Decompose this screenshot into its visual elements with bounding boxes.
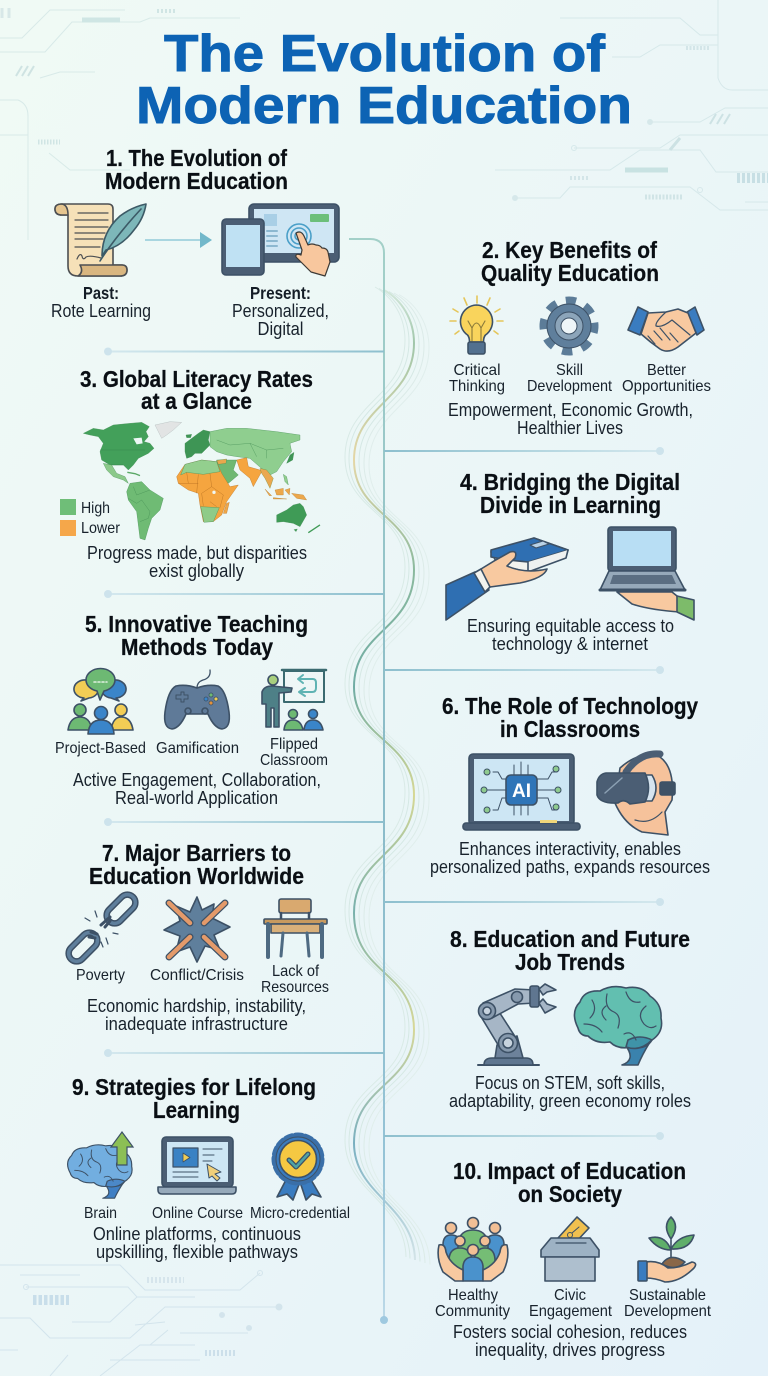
title: Modern Education [136, 77, 632, 135]
text: past: Past: [83, 283, 119, 303]
caption [93, 1224, 301, 1262]
heading: 3. Global Literacy Rates [80, 366, 313, 392]
caption [467, 616, 674, 654]
text: strategy labels [84, 1205, 350, 1222]
caption: Focus on STEM, soft skills, [475, 1073, 665, 1093]
icon: project group [68, 668, 133, 734]
panel: 9. lifelong learning [68, 1074, 350, 1262]
heading [72, 1074, 316, 1123]
heading [105, 145, 288, 194]
caption: adaptability, green economy roles [449, 1091, 691, 1111]
timeline trunk and dividers [104, 239, 664, 1324]
icon: AI laptop: AI [512, 781, 531, 802]
text: barrier labels: Lack of [272, 963, 319, 980]
icon: robot arm [478, 984, 556, 1065]
heading [89, 840, 304, 889]
text: present: Digital [258, 319, 304, 339]
caption: Healthier Lives [517, 418, 623, 438]
heading: Modern Education [105, 168, 288, 194]
icon: gamepad [165, 670, 229, 729]
text: present [232, 283, 329, 339]
heading: Divide in Learning [480, 492, 661, 518]
text: society labels: Sustainable [629, 1287, 706, 1304]
title: The Evolution of [164, 25, 606, 83]
heading: 6. The Role of Technology [442, 693, 698, 719]
heading [85, 611, 308, 660]
text: benefit labels: Critical [454, 362, 500, 379]
text: method labels: Classroom [260, 752, 328, 769]
caption: upskilling, flexible pathways [96, 1242, 298, 1262]
panel: 4. digital divide [446, 469, 694, 654]
legend: High [81, 500, 110, 517]
heading [453, 1158, 686, 1207]
heading: Job Trends [515, 949, 625, 975]
caption: technology & internet [492, 634, 648, 654]
icon: VR headset [597, 754, 675, 835]
text: society labels: Community [435, 1303, 510, 1320]
caption [430, 839, 710, 877]
caption: exist globally [149, 561, 244, 581]
caption: Ensuring equitable access to [467, 616, 674, 636]
icon: handshake [628, 307, 704, 351]
caption: Online platforms, continuous [93, 1224, 301, 1244]
panel: 7. barriers [65, 840, 329, 1034]
caption [453, 1322, 687, 1360]
icon: hand offering book [446, 538, 568, 620]
heading [80, 366, 313, 414]
caption: inequality, drives progress [475, 1340, 665, 1360]
heading [460, 469, 680, 518]
heading: 7. Major Barriers to [102, 840, 291, 866]
text: strategy labels: Micro-credential [250, 1205, 350, 1222]
caption: Real-world Application [115, 788, 278, 808]
text: barrier labels: Conflict/Crisis [150, 967, 244, 984]
icon: tablet and touch screen [222, 204, 339, 276]
heading: on Society [518, 1181, 622, 1207]
title [136, 25, 632, 135]
text: benefit labels: Opportunities [622, 378, 711, 395]
heading: 5. Innovative Teaching [85, 611, 308, 637]
icon: light bulb [450, 296, 503, 354]
icon: online course laptop [158, 1137, 236, 1194]
text: benefit labels: Thinking [449, 378, 505, 395]
text: method labels: Project-Based [55, 740, 146, 757]
heading [481, 237, 659, 286]
caption [448, 400, 693, 438]
caption: Fosters social cohesion, reduces [453, 1322, 687, 1342]
caption: Active Engagement, Collaboration, [73, 770, 321, 790]
text: benefit labels [449, 362, 711, 395]
text: method labels: Gamification [156, 740, 239, 757]
caption [87, 543, 307, 581]
text: present: Present: [250, 283, 311, 303]
icon: ballot box [541, 1217, 599, 1281]
text: society labels [435, 1287, 712, 1320]
text: barrier labels: Poverty [76, 967, 125, 984]
heading: Learning [153, 1097, 240, 1123]
text: barrier labels [76, 963, 329, 996]
caption: Enhances interactivity, enables [459, 839, 681, 859]
caption [87, 996, 306, 1034]
icon: flipped classroom [262, 670, 326, 730]
heading: 8. Education and Future [450, 926, 690, 952]
panel: 6. technology [430, 693, 710, 877]
heading: 9. Strategies for Lifelong [72, 1074, 316, 1100]
caption [73, 770, 321, 808]
text: society labels: Healthy [448, 1287, 498, 1304]
heading: at a Glance [141, 388, 252, 414]
caption: Economic hardship, instability, [87, 996, 306, 1016]
world map [83, 422, 320, 540]
text: method labels [55, 736, 328, 769]
icon: community in hands [438, 1218, 508, 1281]
circuit pattern: bottom left [0, 1265, 282, 1376]
icon: scroll and quill [55, 204, 146, 276]
icon: teal brain [574, 987, 662, 1065]
panel: 2. benefits [448, 237, 711, 438]
text: strategy labels: Brain [84, 1205, 117, 1222]
legend: Lower [81, 520, 121, 537]
heading: 4. Bridging the Digital [460, 469, 680, 495]
caption: inadequate infrastructure [105, 1014, 288, 1034]
decorative wave strands [345, 287, 430, 1264]
circuit pattern: top left [0, 8, 240, 240]
icon: AI laptop [463, 754, 580, 830]
icon: medal [275, 1136, 321, 1200]
heading: in Classrooms [500, 716, 640, 742]
arrow [145, 232, 212, 248]
icon: broken chain [65, 891, 139, 965]
icon: hand holding laptop [600, 527, 694, 620]
heading: Quality Education [481, 260, 659, 286]
legend [60, 499, 121, 537]
heading: 1. The Evolution of [106, 145, 287, 171]
heading [450, 926, 690, 975]
text: society labels: Civic [554, 1287, 586, 1304]
icon: plant in hand [638, 1217, 696, 1282]
text: benefit labels: Skill [556, 362, 583, 379]
heading: Education Worldwide [89, 863, 304, 889]
caption: personalized paths, expands resources [430, 857, 710, 877]
text: past [51, 283, 151, 321]
text: past: Rote Learning [51, 301, 151, 321]
panel: 5. teaching methods [55, 611, 328, 808]
text: society labels: Engagement [529, 1303, 613, 1320]
text: benefit labels: Better [647, 362, 687, 379]
text: present: Personalized, [232, 301, 329, 321]
heading [442, 693, 698, 742]
icon: desk and chair [264, 899, 327, 957]
icon: conflict burst [164, 897, 230, 962]
circuit pattern: top right [495, 0, 768, 210]
caption: Progress made, but disparities [87, 543, 307, 563]
text: method labels: Flipped [270, 736, 318, 753]
icon: gear [541, 298, 597, 354]
panel: 10. society [435, 1158, 712, 1360]
heading: Methods Today [121, 634, 273, 660]
panel: 1. evolution [51, 145, 339, 339]
caption: Empowerment, Economic Growth, [448, 400, 693, 420]
text: strategy labels: Online Course [152, 1205, 243, 1222]
text: benefit labels: Development [527, 378, 612, 395]
text: barrier labels: Resources [261, 979, 329, 996]
caption [449, 1073, 691, 1111]
panel: 3. literacy [60, 366, 320, 581]
icon: brain with arrow [68, 1132, 133, 1198]
heading: 2. Key Benefits of [482, 237, 657, 263]
heading: 10. Impact of Education [453, 1158, 686, 1184]
panel: 8. job trends [449, 926, 691, 1111]
text: society labels: Development [624, 1303, 712, 1320]
